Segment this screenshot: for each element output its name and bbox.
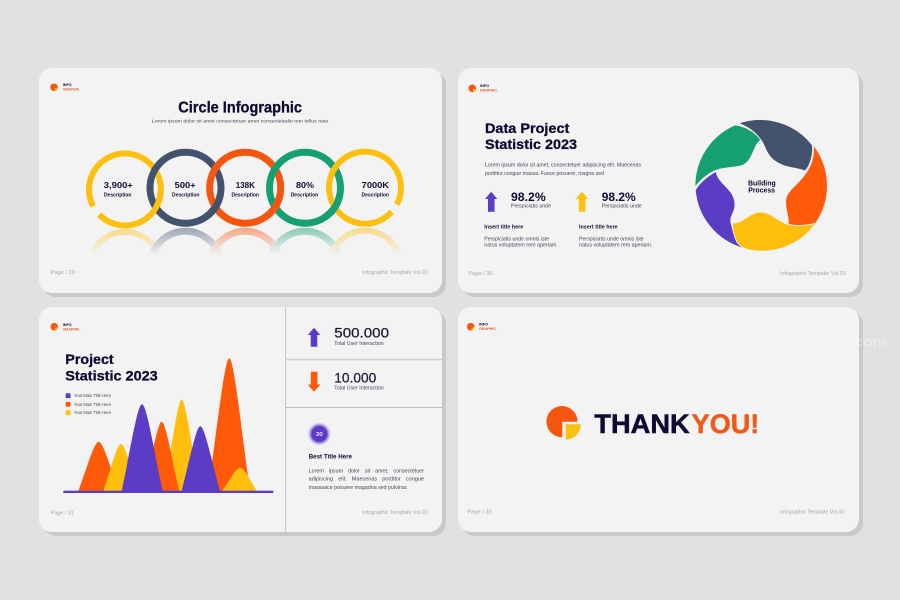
legend: Your Main Title Here: [74, 402, 112, 407]
stat right: Perspiciatis unde: [602, 204, 642, 210]
panel: data project statistic slide: [458, 68, 863, 297]
stat 2: [172, 180, 200, 198]
icon: purple up arrow: [485, 192, 497, 212]
chart: building process swirl: [695, 120, 827, 251]
metric: 10.000: Total User Interaction: [334, 386, 384, 392]
thank you text: THANK: [594, 409, 690, 439]
heading: Statistic 2023: [65, 367, 158, 383]
stat 3: Description: [232, 192, 259, 198]
stat 2: Description: [172, 192, 200, 198]
thank you text: YOU!: [692, 409, 759, 439]
subtitle: Lorem ipsum dolor sit amet consectetuer amet consectetadio non tellus nato: [152, 118, 329, 124]
text block right: natus voluptatem rem aperiam.: [579, 242, 652, 248]
text block left: Insert title here: [484, 224, 523, 230]
heading: [65, 351, 158, 383]
text block right: Insert title here: [579, 224, 618, 230]
stat 1: 3,900+: [104, 180, 133, 190]
stat 5: Description: [362, 192, 389, 198]
stat 3: [232, 180, 259, 198]
logo: [50, 82, 80, 92]
text block: best title: Best Title Here: [309, 454, 353, 461]
footer: Infographic Template Vol.02: [362, 270, 428, 276]
logo: GRAPHIC.: [63, 326, 81, 331]
footer: Page / 29: [51, 270, 75, 276]
heading: Statistic 2023: [485, 136, 577, 152]
logo: INFO: [479, 322, 488, 327]
footer: [51, 270, 428, 276]
intro text: Lorem ipsum dolor sit amet, consectetuer adipiscing elit. Maecenas: [485, 163, 642, 169]
metric: 500.000: [334, 324, 389, 347]
footer: Infographic Template Vol.03: [780, 509, 845, 515]
footer: Page / 30: [468, 271, 493, 277]
stat 4: 80%: [296, 180, 314, 190]
thank you text: [594, 409, 759, 439]
heading: Project: [65, 351, 114, 367]
text block: best title: Lorem ipsum dolor sit amet, consectetuer: [309, 468, 424, 474]
text block left: [484, 224, 558, 248]
logo: GRAPHIC.: [479, 326, 497, 331]
logo: [468, 83, 498, 92]
footer: [467, 509, 845, 515]
logo: INFO: [63, 82, 72, 87]
logo: [467, 322, 497, 331]
metric: 500.000: 500.000: [334, 324, 389, 340]
stat 1: [104, 180, 133, 198]
metric: 10.000: 10.000: [334, 369, 377, 385]
stat 1: Description: [104, 192, 132, 198]
legend: [66, 393, 112, 415]
metric: 500.000: Total User Interaction: [334, 341, 384, 347]
swirl centre label: [748, 180, 776, 195]
icon: purple up arrow: [308, 328, 320, 347]
swirl centre label: Building: [748, 180, 776, 187]
heading: Data Project: [485, 120, 570, 136]
stat left: 98.2%: [511, 190, 546, 204]
icon: pie logo: [546, 406, 581, 440]
heading: [485, 120, 577, 152]
footer: Page / 31: [51, 510, 74, 516]
stat 3: 138K: [236, 180, 256, 190]
swirl centre label: Process: [748, 188, 775, 195]
icon: yellow up arrow: [576, 192, 588, 212]
stat left: Perspiciatis unde: [511, 204, 551, 210]
stat right: 98.2%: [602, 190, 636, 204]
circle reflections: [90, 228, 401, 253]
intro text: [485, 163, 642, 177]
stat 2: 500+: [175, 180, 196, 190]
stat 4: Description: [291, 192, 318, 198]
logo: GRAPHIC.: [63, 87, 80, 92]
panel: project statistic slide: [39, 307, 446, 536]
intro text: porttitor congue massa. Fusce posuere, magna sed: [485, 171, 604, 177]
watermark: www.25xt.com: [777, 334, 887, 350]
stat left: [511, 190, 551, 210]
stat 5: [362, 180, 390, 198]
text block left: Perspiciatis unde omnis iste: [484, 236, 549, 242]
logo: GRAPHIC.: [480, 87, 498, 92]
logo: INFO: [480, 83, 489, 88]
text block: best title: [309, 454, 424, 491]
text block right: Perspiciatis unde omnis iste: [579, 236, 644, 242]
text block left: natus voluptatem rem aperiam.: [484, 242, 558, 248]
icon: orange down arrow: [308, 372, 321, 392]
metric: 10.000: [334, 369, 384, 392]
stat 5: 7000K: [362, 180, 390, 190]
title: Circle Infographic: [178, 100, 302, 117]
icon: glowing badge: 30: [316, 432, 323, 438]
legend: Your Main Title Here: [74, 410, 112, 415]
stat right: [602, 190, 642, 210]
logo: INFO: [63, 322, 72, 327]
footer: Infographic Template Vol.02: [362, 510, 428, 516]
footer: [468, 271, 846, 277]
icon: glowing badge: [307, 422, 331, 446]
legend: Your Main Title Here: [74, 393, 112, 398]
panel: thank you slide: [458, 307, 863, 536]
text block right: [579, 224, 652, 248]
text block: best title: massaace posuere magadna sed pulvinar.: [309, 485, 408, 491]
logo: [50, 322, 81, 331]
footer: [51, 510, 428, 516]
footer: Page / 32: [467, 509, 492, 515]
text block: best title: adipiscing elit. Maecenas porttitor congue: [309, 476, 424, 482]
chart: mountain peaks: [63, 358, 273, 493]
panel: circle infographic slide: [39, 68, 446, 304]
stat 4: [291, 180, 318, 198]
interlocking circles: [89, 152, 401, 225]
footer: Infographic Template Vol.03: [780, 271, 846, 277]
